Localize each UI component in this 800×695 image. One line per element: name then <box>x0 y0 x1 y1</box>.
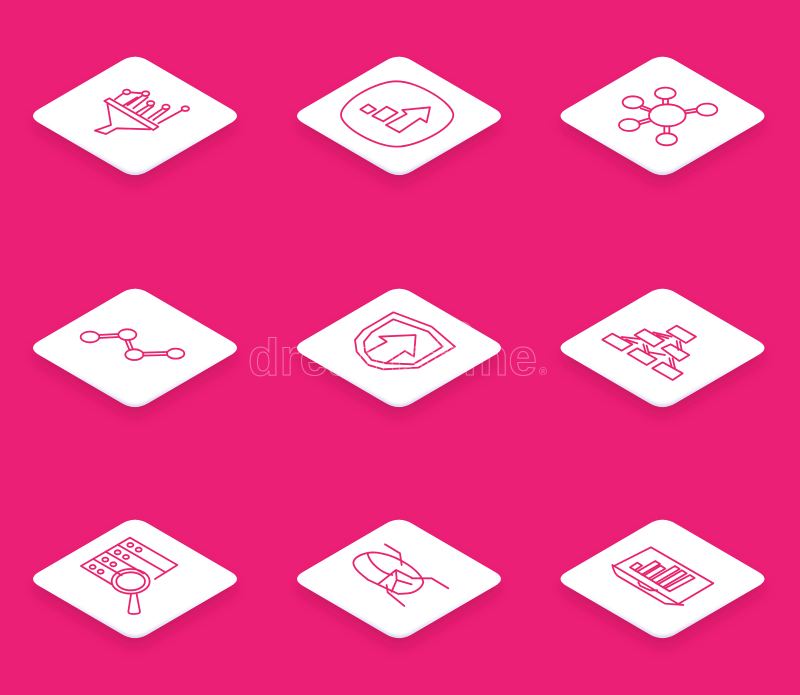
icon: hub and spokes <box>619 88 717 145</box>
icon: linked blocks <box>602 326 696 380</box>
tile: node path <box>33 286 237 416</box>
icon: connected nodes <box>81 329 184 360</box>
watermark: dreamstime <box>248 329 537 387</box>
icon: funnel with data points <box>95 90 189 134</box>
tile: growth chart <box>297 54 501 184</box>
tile: laptop chart <box>560 517 764 647</box>
tile: shield <box>297 286 501 416</box>
tile: funnel <box>33 54 237 184</box>
tile: pie chart <box>297 517 501 647</box>
icon: laptop with bar chart <box>612 547 713 605</box>
tile: flow diagram <box>560 286 764 416</box>
icon: shield with arrow <box>355 312 455 369</box>
tile: hub network <box>560 54 764 184</box>
icon: server racks with magnifier <box>81 538 177 614</box>
icon: rising bars and arrow <box>341 81 453 147</box>
tile: server search <box>33 517 237 647</box>
icon: isometric pie chart <box>353 544 448 606</box>
watermark: ® <box>539 366 547 378</box>
